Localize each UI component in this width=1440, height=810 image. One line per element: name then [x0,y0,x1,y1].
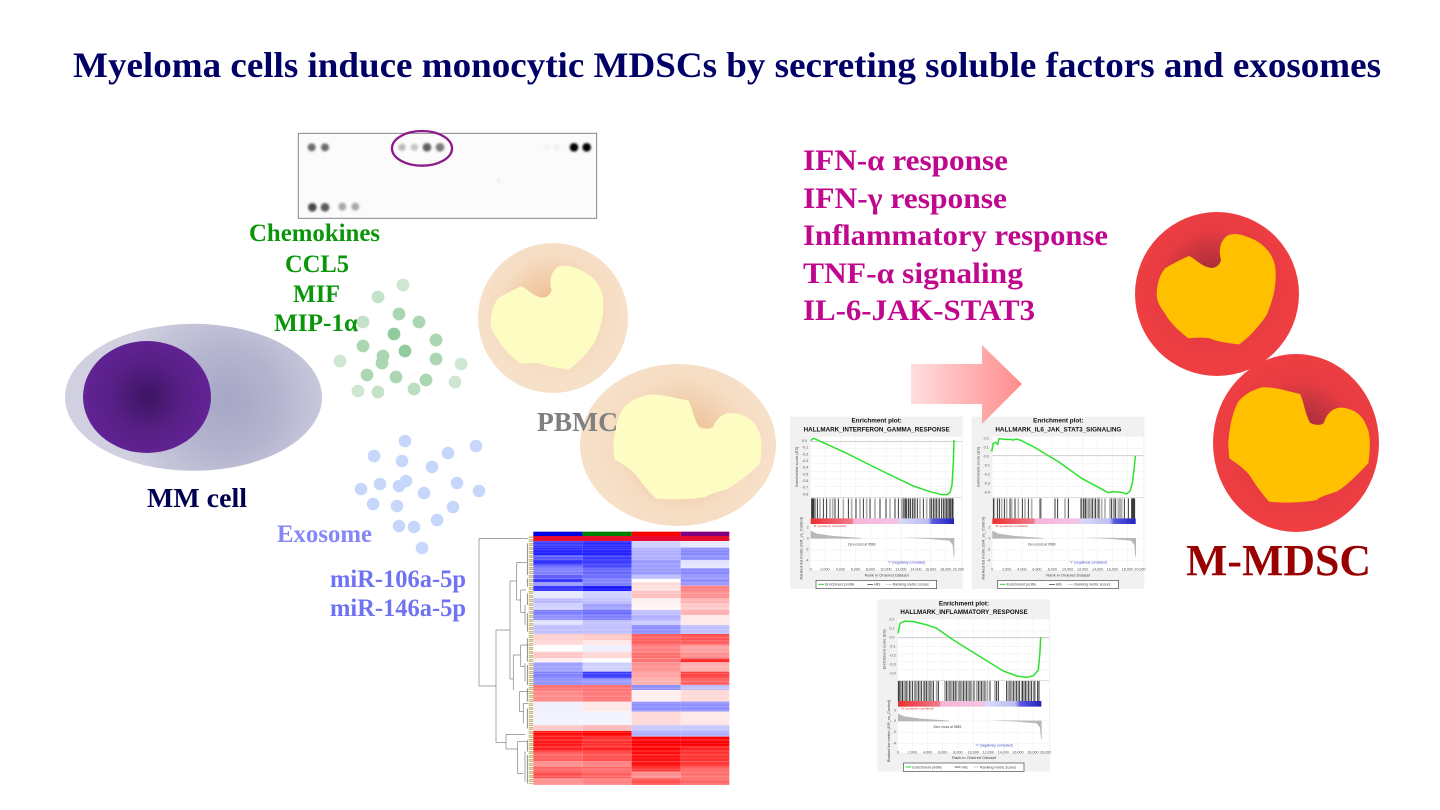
plot 1 hits barcode [812,498,953,518]
PBMC label: PBMC [537,407,618,437]
plot 2 legend: Hits [1056,583,1062,587]
plot 1 axis labels [794,439,964,580]
plot 2 axis labels: 'Y' (negatively correlated) [1070,561,1107,565]
plot 3 axis labels: 'Y' (negatively correlated) [975,743,1013,747]
M-MDSC cell bottom [1213,354,1379,532]
plot 2 axis labels: 10,000 [1062,568,1073,572]
exosome label: miR-106a-5p [330,566,466,593]
blot spots [308,143,591,212]
plot 1 axis labels: 2,000 [820,568,830,572]
plot 1 axis labels: 18,000 [940,568,951,572]
pathway list: Inflammatory response [803,219,1108,252]
chemokines label: MIP-1α [274,310,358,337]
plot 3 axis labels: 0 [897,750,899,754]
plot 3 title: Enrichment plot: [939,600,989,607]
plot 2 axis labels: -2 [987,547,990,551]
plot 2 hits barcode [993,498,1135,518]
plot 2 axis labels: 8,000 [1048,568,1057,572]
plot 2 axis labels: 0 [988,536,990,540]
plot 1 legend [825,583,929,587]
enrichment plot: IL6 JAK STAT3 [972,417,1146,589]
plot 3 axis labels: 0.1 [889,627,894,631]
plot 1 legend: Ranking metric scores [893,583,929,587]
plot 2 title: Enrichment plot: [1033,418,1083,425]
plot 2 axis labels: 0.2 [984,437,989,441]
chemokines label: CCL5 [285,251,349,278]
plot 2 axis labels: Ranked list metric (GR_vs_Control) [980,516,985,580]
plot 2 axis labels: -0.1 [984,463,990,467]
plot 1 axis labels: -4 [805,559,809,563]
plot 3 axis labels: 2 [894,708,896,712]
green chemokine dots [334,279,467,398]
plot 1 axis labels: -0.6 [802,479,808,483]
plot 1 axis labels: 20,000 [953,568,964,572]
pathway list: TNF-α signaling [803,257,1023,290]
plot 1 title: HALLMARK_INTERFERON_GAMMA_RESPONSE [804,426,950,433]
plot 1 axis labels: Enrichment score (ES) [794,446,799,487]
MM cell nucleus [83,341,211,453]
plot 1 axis labels: 0 [810,568,812,572]
expression rows [533,536,729,785]
plot 2 axis labels: 6,000 [1032,568,1042,572]
plot 3 title [900,600,1028,616]
plot 2 axis labels: 14,000 [1092,568,1103,572]
plot 3 axis labels [881,618,1051,762]
chemokines label: MIF [293,281,340,308]
plot 3 legend [912,765,1016,769]
enrichment plot: interferon gamma [790,417,964,589]
plot 3 axis labels: 8,000 [953,750,963,754]
plot 2 axis labels: -0.4 [984,491,990,495]
plot 1 title: Enrichment plot: [852,418,902,425]
plot 3 axis labels: 20,000 [1040,750,1051,754]
plot 3 axis labels: 12,000 [983,750,994,754]
plot 1 axis labels: 10,000 [880,568,892,572]
plot 1 curve [811,438,954,495]
plot 2 axis labels: -0.3 [984,482,990,486]
plot 2 title: HALLMARK_IL6_JAK_STAT3_SIGNALING [995,426,1121,433]
plot 1 axis labels: -2 [805,547,809,551]
plot 3 axis labels: 14,000 [998,750,1009,754]
plot 3 axis labels: 0.0 [889,636,894,640]
MM cell label: MM cell [147,483,248,513]
plot 3 axis labels: 16,000 [1012,750,1024,754]
plot 3 axis labels: 4,000 [923,750,932,754]
plot 1 axis labels: 6,000 [851,568,860,572]
PBMC cell top [478,243,628,393]
plot 1 axis labels: 2 [807,526,809,530]
plot 2 axis labels: 0.0 [984,454,989,458]
plot 1 axis labels: 'M' (positively correlated) [813,524,846,528]
plot 2 curve [992,439,1135,494]
plot 2 axis labels: -0.2 [984,472,990,476]
plot 3 axis labels: 'M' (positively correlated) [901,707,933,711]
plot 1 axis labels: 16,000 [925,568,936,572]
plot 1 axis labels: -0.2 [802,452,808,456]
plot 2 axis labels: 'M' (positively correlated) [995,524,1028,528]
plot 2 axis labels: Rank in Ordered Dataset [1046,572,1091,577]
exosome label: Exosome [277,521,372,548]
pathway list: IFN-α response [803,144,1008,177]
blue exosome dots [355,435,485,554]
sample color bar [533,532,729,536]
M-MDSC label: M-MDSC [1186,536,1371,585]
plot 3 axis labels: Enrichment score (ES) [881,629,886,669]
plot 2 title [995,418,1121,433]
plot 1 axis labels: Rank in Ordered Dataset [865,572,910,577]
MM cell [65,324,322,471]
plot 3 axis labels: Zero cross at 9589 [933,725,961,729]
M-MDSC nucleus bottom [1228,387,1370,503]
plot 2 axis labels: Zero cross at 9589 [1028,542,1056,546]
PBMC nucleus bottom [613,395,762,499]
plot 2 legend [1007,583,1111,587]
plot 3 axis labels: Ranked list metric (GR_vs_Control) [886,699,891,762]
plot 2 axis labels: 4,000 [1017,568,1027,572]
pathway list: IFN-γ response [803,182,1007,215]
plot 3 axis labels: 0 [894,719,896,723]
panel: cytokine array blot [298,131,597,218]
dendrogram [479,537,531,784]
chemokines label: Chemokines [249,220,380,247]
plot 3 curve [898,621,1041,677]
chemokines label [249,220,380,337]
plot 3 axis labels: -0.3 [889,663,896,667]
enrichment plot: inflammatory [877,599,1051,772]
PBMC nucleus top [491,266,603,369]
plot 3 title: HALLMARK_INFLAMMATORY_RESPONSE [900,609,1028,616]
plot 1 axis labels: -0.1 [802,446,808,450]
plot 1 axis labels: 4,000 [836,568,845,572]
plot 1 axis labels: 14,000 [910,568,922,572]
plot 1 axis labels: Ranked list metric (GR_vs_Control) [799,516,804,580]
plot 3 axis labels: 18,000 [1027,750,1039,754]
plot 1 axis labels: 8,000 [866,568,875,572]
plot 2 axis labels [976,437,1146,580]
plot 2 legend: Enrichment profile [1007,583,1036,587]
plot 2 axis labels: 12,000 [1077,568,1088,572]
plot 1 axis labels: -0.5 [802,472,808,476]
plot 3 hits barcode [898,681,1039,701]
plot 2 axis labels: 2,000 [1002,568,1011,572]
plot 3 axis labels: 0.2 [889,618,894,622]
plot 3 axis labels: 6,000 [938,750,947,754]
plot 1 axis labels: 0.0 [802,439,807,443]
plot 3 axis labels: -0.4 [889,672,896,676]
plot 1 axis labels: 'Y' (negatively correlated) [888,561,925,565]
plot 2 legend: Ranking metric scores [1074,583,1111,587]
plot 3 axis labels: 10,000 [968,750,979,754]
plot 3 axis labels: -0.2 [889,654,896,658]
plot 2 axis labels: 0.1 [984,446,989,450]
PBMC cell bottom [580,364,776,526]
plot 1 axis labels: -0.4 [802,466,808,470]
M-MDSC nucleus top [1157,234,1276,344]
plot 1 legend: Enrichment profile [825,583,854,587]
highlight ellipse [392,131,452,166]
plot 3 axis labels: -4 [893,741,896,745]
plot 1 axis labels: -0.8 [802,492,808,496]
plot 2 axis labels: Enrichment score (ES) [976,446,981,487]
pathway list: IL-6-JAK-STAT3 [803,294,1035,327]
exosome label: miR-146a-5p [330,595,466,622]
plot 2 axis labels: 16,000 [1107,568,1118,572]
plot 3 axis labels: -2 [893,730,896,734]
plot 3 axis labels: -0.1 [889,645,896,649]
plot 1 axis labels: 0 [807,536,809,540]
plot 2 axis labels: 18,000 [1122,568,1133,572]
plot 1 axis labels: -0.7 [802,486,808,490]
plot 3 legend: Hits [961,765,968,769]
arrow [911,345,1022,424]
plot 3 axis labels: 2,000 [908,750,917,754]
plot 1 axis labels: 12,000 [895,568,907,572]
plot 3 legend: Ranking metric scores [980,765,1016,769]
plot 2 axis labels: 0 [991,568,993,572]
plot 2 axis labels: 20,000 [1134,568,1146,572]
exosome label [277,521,466,622]
plot 2 axis labels: 2 [988,526,990,530]
plot 3 legend: Enrichment profile [912,765,942,769]
plot 1 title [804,418,950,433]
plot 1 axis labels: -0.3 [802,459,808,463]
M-MDSC cell top [1135,212,1299,376]
plot 1 axis labels: Zero cross at 9589 [848,542,876,546]
pathway list [803,144,1108,327]
plot 1 legend: Hits [874,583,880,587]
heatmap with dendrogram [479,532,729,785]
title: Myeloma cells induce monocytic MDSCs by secreting soluble factors and exosomes [73,45,1381,85]
plot 3 axis labels: Rank in Ordered Dataset [952,755,997,760]
plot 2 axis labels: -4 [987,559,990,563]
